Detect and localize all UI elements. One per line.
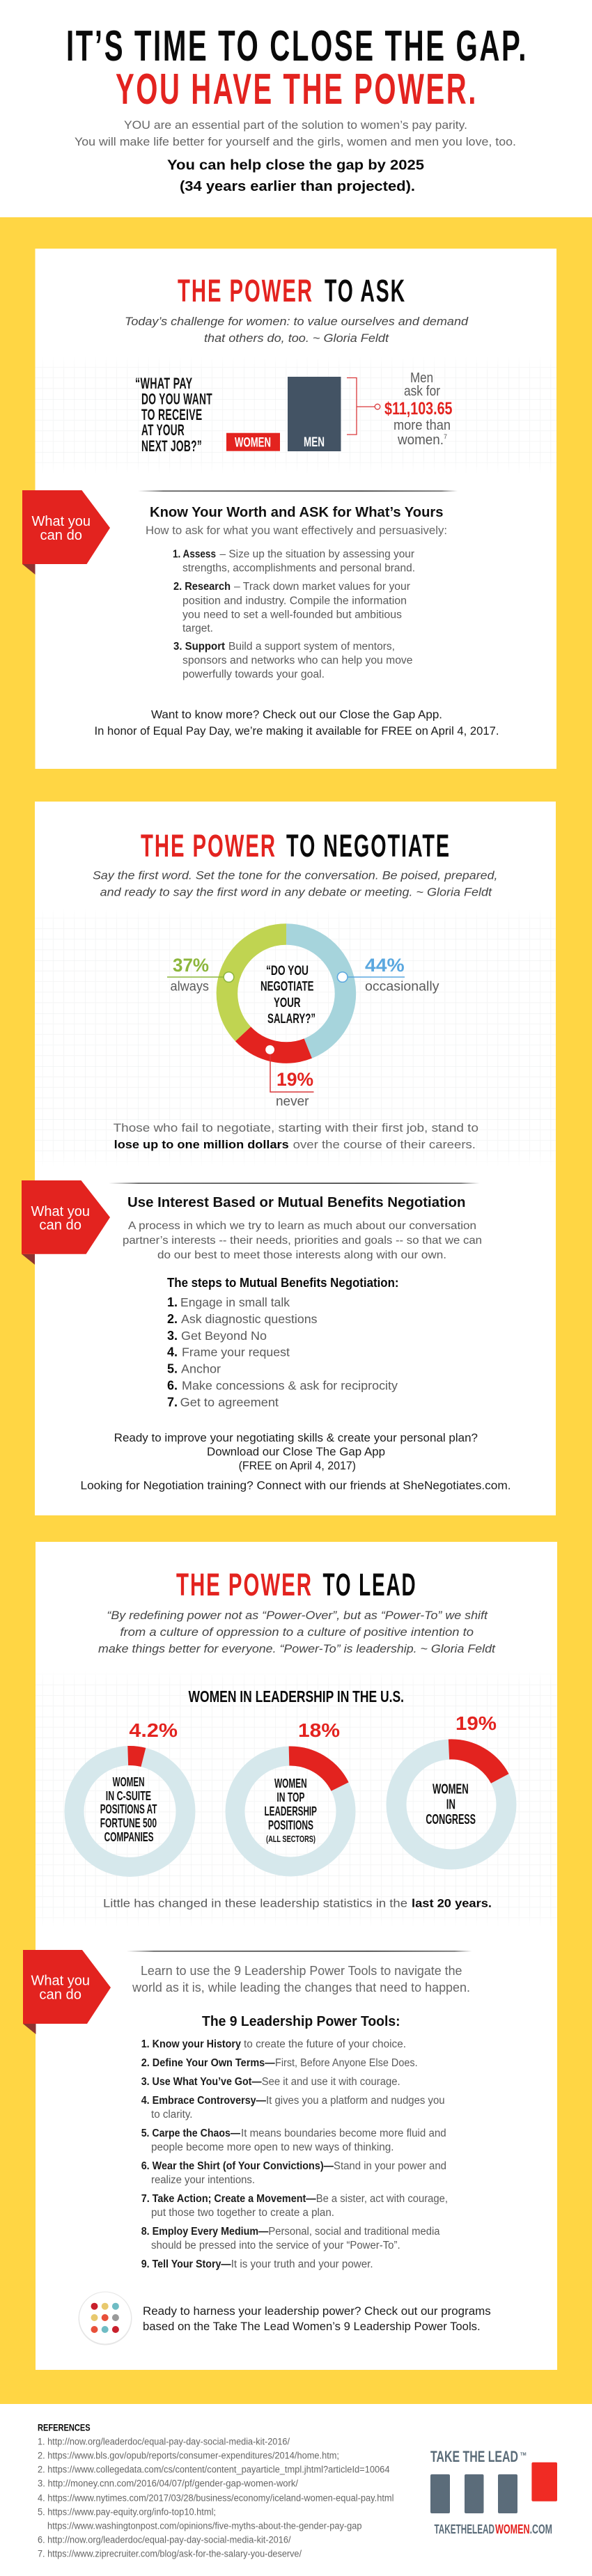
tools list: First, Before Anyone Else Does. [275,2057,418,2069]
tools list: It gives you a platform and nudges you [266,2095,445,2107]
steps list: sponsors and networks who can help you move [182,655,412,666]
donut: top leadership 18%: (ALL SECTORS) [266,1834,316,1844]
men bar [288,377,341,451]
finding text: Those who fail to negotiate, starting with their first job, stand to [114,1121,478,1134]
tools list: Personal, social and traditional media [268,2226,440,2238]
description: do our best to meet those interests along with our own. [157,1249,446,1261]
references [38,2422,394,2559]
tools list: It means boundaries become more fluid and [241,2128,446,2139]
finding text: last 20 years. [412,1896,492,1910]
logo: take the lead: TM [520,2453,527,2457]
donut: c-suite 4.2%: WOMEN [113,1775,145,1789]
tools list: 9. Tell Your Story— [141,2258,231,2270]
steps list: Get to agreement [180,1396,279,1410]
ribbon: what you can do: What you [32,514,91,529]
quote: Today’s challenge for women: to value ourselves and demand [125,315,469,328]
tools list: Stand in your power and [334,2160,446,2172]
finding text: Little has changed in these leadership statistics in the [103,1896,407,1910]
references: 4. https://www.nytimes.com/2017/03/28/business/economy/iceland-women-equal-pay.html [38,2493,394,2504]
label: 37% always: 37% [173,955,209,976]
donut centre question: SALARY?” [267,1011,316,1027]
description [123,1220,482,1261]
tools list: should be pressed into the service of your “Power-To”. [151,2240,400,2251]
heading: the power to lead: THE POWER [176,1567,313,1602]
donut: c-suite 4.2%: FORTUNE 500 [100,1816,157,1830]
references: 3. http://money.cnn.com/2016/04/07/pf/gender-gap-women-work/ [38,2479,298,2489]
call to action: app: In honor of Equal Pay Day, we’re making it available for FREE on April 4, 2017. [95,725,499,737]
donut: c-suite 4.2%: IN C-SUITE [106,1789,151,1803]
subheading: Know Your Worth and ASK for What’s Yours [150,505,443,520]
steps list: Frame your request [182,1345,290,1359]
call to action: app and training: (FREE on April 4, 2017) [239,1460,356,1472]
survey question: AT YOUR [141,421,185,439]
heading: the power to negotiate: THE POWER [141,828,276,864]
steps list: 1. [167,1295,178,1309]
quote: Say the first word. Set the tone for the conversation. Be poised, prepared, [93,869,497,882]
heading: the power to lead: TO LEAD [323,1567,416,1602]
intro text: Learn to use the 9 Leadership Power Tools to navigate the [141,1964,462,1978]
donut: congress 19%: 19% [455,1712,497,1734]
donut: top leadership 18%: POSITIONS [268,1818,313,1832]
tools list: 8. Employ Every Medium— [141,2226,269,2238]
ribbon: what you can do: What you [31,1204,90,1219]
ribbon: what you can do [23,1950,111,2034]
men bar: MEN [304,435,325,450]
segment: 19% never [243,1034,308,1052]
steps list: Get Beyond No [181,1329,267,1343]
ribbon: what you can do [22,490,110,575]
segment: 37% always [227,935,286,1034]
steps list: position and industry. Compile the information [182,595,407,607]
tools heading: The 9 Leadership Power Tools: [202,2014,400,2029]
references: 6. http://now.org/leaderdoc/equal-pay-day-social-media-kit-2016/ [38,2535,291,2545]
label: 44% occasionally [337,955,439,994]
logo: take the lead: TAKETHELEAD [435,2522,494,2536]
references: 7. https://www.ziprecruiter.com/blog/ask-for-the-salary-you-deserve/ [38,2549,302,2559]
steps heading: The steps to Mutual Benefits Negotiation: [167,1276,398,1290]
chart heading: WOMEN IN LEADERSHIP IN THE U.S. [188,1687,404,1705]
steps list: 7. [167,1396,178,1410]
panel: the power to ask [22,249,556,769]
call to action: app and training: Ready to improve your negotiating skills & create your personal plan? [114,1432,478,1444]
steps list: you need to set a well-founded but ambitious [182,609,402,621]
donut: top leadership 18% [235,1719,345,1866]
steps list: – Track down market values for your [234,581,410,593]
steps list: Make concessions & ask for reciprocity [182,1379,398,1393]
ribbon: what you can do: can do [39,1218,81,1233]
donut: top leadership 18%: LEADERSHIP [265,1804,317,1818]
tools list: Be a sister, act with courage, [316,2193,448,2205]
logo: take the lead: TAKE THE LEAD [430,2448,518,2465]
donut: top leadership 18%: WOMEN [274,1777,307,1790]
references: 2. https://www.bls.gov/opub/reports/consumer-expenditures/2014/home.htm; [38,2451,339,2461]
steps list: 2. Research [173,581,231,593]
label: 37% always [167,955,234,994]
steps list: 3. [167,1329,178,1343]
call to action: app and training: Looking for Negotiation training? Connect with our friends at SheNegotiates.com. [81,1480,511,1492]
call to action: app [95,709,499,737]
description: partner’s interests -- their needs, priorities and goals -- so that we can [123,1235,482,1247]
women bar [226,433,280,451]
steps list: 6. [167,1379,178,1393]
donut centre question: “DO YOU [266,963,309,978]
steps list: Engage in small talk [180,1295,290,1309]
finding text [114,1121,478,1151]
logo: take the lead: .COM [530,2522,552,2536]
donut: top leadership 18%: 18% [298,1719,340,1741]
steps list: 1. Assess [173,549,216,561]
title [66,22,528,114]
tools list: It is your truth and your power. [231,2258,373,2270]
references: https://www.washingtonpost.com/opinions/five-myths-about-the-gender-pay-gap [47,2521,362,2531]
tools list: to clarity. [151,2109,192,2121]
ribbon: what you can do [22,1180,110,1265]
bracket connector [347,377,375,435]
donut chart: do you negotiate your salary [167,935,439,1109]
label: 44% occasionally: 44% [365,955,405,976]
donut centre question: NEGOTIATE [260,979,313,994]
intro text: YOU are an essential part of the solution to women’s pay parity. [124,118,467,132]
call to action: app and training [81,1432,511,1492]
finding text: over the course of their careers. [293,1138,476,1151]
men ask for more: ask for [404,384,440,399]
quote [98,1609,496,1655]
call to action: programs: Ready to harness your leadership power? Check out our programs [143,2305,491,2318]
tools list: put those two together to create a plan. [151,2207,334,2219]
steps list: Ask diagnostic questions [181,1312,318,1326]
donut: c-suite 4.2%: POSITIONS AT [100,1802,157,1816]
steps list: strengths, accomplishments and personal brand. [182,563,415,575]
connector dot [375,404,380,409]
references: REFERENCES [38,2422,91,2433]
logo: take the lead: WOMEN [495,2522,530,2536]
quote: that others do, too. ~ Gloria Feldt [204,331,389,345]
steps list: 2. [167,1312,178,1326]
label: 19% never [265,1045,313,1109]
tools list: to create the future of your choice. [244,2038,406,2050]
intro callout: (34 years earlier than projected). [180,179,415,194]
finding text: lose up to one million dollars [114,1138,289,1151]
heading: the power to ask: THE POWER [178,273,313,309]
quote: “By redefining power not as “Power-Over”, but as “Power-To” we shift [107,1609,488,1622]
call to action: app and training: Download our Close The Gap App [207,1446,385,1458]
men ask for more: women. [397,432,444,448]
steps list: 4. [167,1345,178,1359]
tools list: See it and use it with courage. [262,2076,400,2088]
quote [125,315,469,345]
references: 1. http://now.org/leaderdoc/equal-pay-day-social-media-kit-2016/ [38,2437,290,2447]
donut: congress 19%: CONGRESS [426,1812,476,1827]
tools list: 1. Know your History [141,2038,241,2050]
label: 19% never: 19% [276,1069,313,1090]
tools list: 3. Use What You’ve Got— [141,2076,262,2088]
survey question: “WHAT PAY [135,375,192,392]
survey question: TO RECEIVE [141,406,202,423]
quote [93,869,497,899]
survey question: DO YOU WANT [141,391,212,408]
logo: take the lead [430,2448,557,2536]
intro callout: You can help close the gap by 2025 [167,157,424,173]
survey question: NEXT JOB?” [141,437,202,455]
tools list: 7. Take Action; Create a Movement— [141,2193,316,2205]
steps list: Anchor [181,1362,221,1376]
intro text [75,118,516,148]
tools list [141,2038,448,2270]
description: A process in which we try to learn as much about our conversation [128,1220,476,1232]
tools list: 5. Carpe the Chaos— [141,2128,240,2139]
steps list [173,549,415,680]
men ask for more: $11,103.65 [384,399,453,419]
quote: and ready to say the first word in any debate or meeting. ~ Gloria Feldt [100,886,492,899]
intro text [132,1964,470,1995]
men ask for more [384,370,453,448]
ribbon: what you can do: What you [31,1974,90,1989]
subheading: Use Interest Based or Mutual Benefits Negotiation [127,1195,465,1210]
call to action: programs: based on the Take The Lead Women’s 9 Leadership Power Tools. [143,2320,481,2333]
heading: the power to negotiate [141,828,451,864]
segment: 44% occasionally [286,935,345,1049]
icon: nine dots [78,2291,132,2345]
heading: the power to ask: TO ASK [325,273,406,309]
tools list: realize your intentions. [151,2174,255,2186]
steps list [167,1295,398,1410]
tools list: 4. Embrace Controversy— [141,2095,266,2107]
quote: make things better for everyone. “Power-To” is leadership. ~ Gloria Feldt [98,1642,496,1655]
donut: c-suite 4.2%: 4.2% [129,1719,178,1741]
heading: the power to negotiate: TO NEGOTIATE [286,828,451,864]
quote: from a culture of oppression to a culture of positive intention to [120,1625,474,1639]
steps list: 3. Support [173,641,225,653]
steps list: target. [182,623,213,634]
donut: c-suite 4.2%: COMPANIES [104,1830,154,1844]
call to action: app: Want to know more? Check out our Close the Gap App. [151,709,442,721]
intro callout [167,157,424,194]
donut centre question [260,963,316,1027]
panel: the power to lead [23,1542,557,2370]
references: 5. https://www.pay-equity.org/info-top10.html; [38,2507,216,2518]
donut: congress 19% [396,1712,506,1859]
bar chart: what pay do you want [135,370,453,455]
women bar: WOMEN [235,436,271,451]
tools list: 6. Wear the Shirt (of Your Convictions)— [141,2160,334,2172]
donut centre question: YOUR [274,995,301,1010]
donut: congress 19%: WOMEN [433,1782,469,1797]
ribbon: what you can do: can do [39,1988,81,2003]
tools list: people become more open to new ways of thinking. [151,2141,394,2153]
steps list: powerfully towards your goal. [182,669,325,680]
label: 19% never: never [276,1095,309,1109]
steps list: – Size up the situation by assessing your [220,549,414,561]
call to action: programs [143,2305,491,2333]
men ask for more: Men [410,370,433,386]
panel: the power to negotiate [22,802,556,1515]
intro text: You will make life better for yourself and the girls, women and men you love, too. [75,135,516,148]
men ask for more: 7 [444,433,447,440]
donut: top leadership 18%: IN TOP [276,1790,305,1804]
tools list: 2. Define Your Own Terms— [141,2057,275,2069]
subheading intro: How to ask for what you want effectively and persuasively: [146,524,447,537]
donut: congress 19%: IN [446,1797,455,1813]
survey question [135,375,212,455]
ribbon: what you can do: can do [40,528,82,543]
label: 37% always: always [170,980,209,994]
steps list: 5. [167,1362,178,1376]
donut: c-suite 4.2% [74,1719,185,1867]
steps list: Build a support system of mentors, [228,641,395,653]
intro text: world as it is, while leading the changes that need to happen. [132,1981,470,1995]
references: 2. https://www.collegedata.com/cs/content/content_payarticle_tmpl.jhtml?articleId=10064 [38,2465,390,2475]
men ask for more: more than [394,418,451,433]
label: 44% occasionally: occasionally [365,980,439,994]
